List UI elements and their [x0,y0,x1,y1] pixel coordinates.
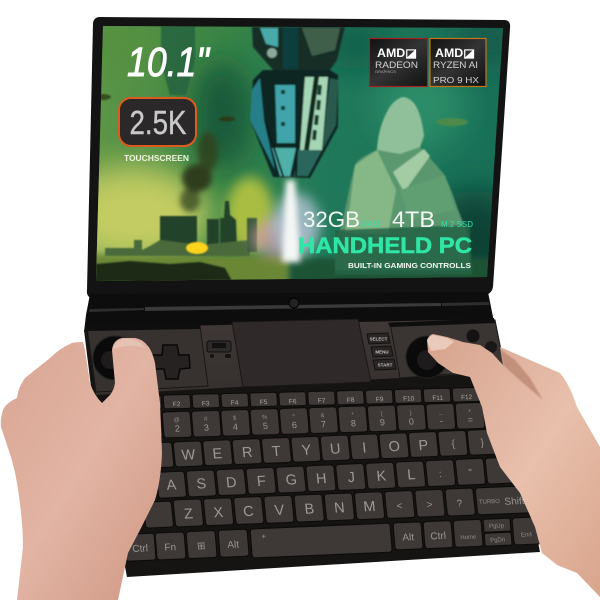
button: menu [371,346,393,357]
ASDF key row: F [256,474,267,490]
bottom key row: Fn [164,542,177,554]
city skyline [105,201,257,256]
number key row [133,402,485,439]
right control panel [390,320,505,378]
function key row: F4 [231,400,239,407]
ASDF key row: G [285,472,298,489]
button: menu: MENU [375,350,389,354]
function key row [134,387,480,410]
bottom key row: Home [460,535,477,541]
smoke plume [180,132,218,212]
function key row: F10 [403,395,415,403]
badge: 2.5K [119,98,196,146]
spec: 32GB RAM: RAM [361,220,380,229]
ZXCV key row [143,486,534,528]
device body [84,319,540,577]
spec: 4TB M.2 SSD [392,212,473,227]
right analog stick [406,336,448,378]
left thumbnail [113,339,145,349]
spec: 4TB M.2 SSD: 4TB [392,207,435,232]
bottom key row: ☀ [261,533,267,541]
ASDF key row: " [468,468,473,479]
badge: AMD Ryzen AI Pro 9 HX: AMD◪ [435,48,475,60]
bottom key row: Ctrl [430,531,446,542]
QWERTY key row: I [362,440,367,456]
bottom key row: PgDn [490,537,505,544]
number key row: 6 [291,420,297,430]
tagline: built-in gaming controls: BUILT-IN GAMING CONTROLLS [348,261,471,270]
function key row: F11 [432,395,444,402]
face buttons [466,330,497,353]
function key row: F5 [260,399,268,406]
ZXCV key row: Shift [504,496,525,508]
ZXCV key row: ? [456,498,463,510]
ZXCV key row: C [242,504,255,520]
number key row: = [467,415,473,425]
spec: 32GB RAM: 32GB [303,207,360,232]
hooded figure [335,97,472,275]
ASDF key row: : [439,469,442,480]
ZXCV key row: M [363,499,376,515]
ASDF key row [156,456,528,498]
left control panel [87,326,208,392]
QWERTY key row: } [480,438,485,449]
laptop lid bezel [87,17,510,299]
bottom key row [124,517,541,563]
badge: AMD Ryzen AI Pro 9 HX [430,38,486,86]
QWERTY key row: { [451,439,456,450]
QWERTY key row: U [329,441,341,458]
button: select: SELECT [370,336,388,342]
ZXCV key row: N [333,500,346,517]
d-pad [150,345,190,379]
number key row: # [204,417,208,423]
hinge [84,292,494,332]
number key row: % [262,415,268,421]
bottom key row: Alt [402,532,415,544]
keyboard deck [87,319,505,395]
number key row: 4 [232,422,238,432]
left analog stick [93,336,137,380]
function key row: F6 [289,398,297,405]
label: touchscreen: TOUCHSCREEN [124,154,189,163]
QWERTY key row: P [418,438,429,454]
badge: 2.5K: 2.5K [130,104,186,141]
bottom key row: Alt [227,540,240,551]
button: start: START [378,362,393,368]
function key row: F7 [318,398,326,405]
left hand [1,338,162,600]
number key row: @ [173,417,180,424]
explosion [186,242,208,254]
right hand crease shadow [501,350,543,400]
ZXCV key row: > [426,500,433,511]
spec: 4TB M.2 SSD: M.2 SSD [441,220,473,229]
ZXCV key row: TURBO [479,499,501,506]
number key row: 5 [262,421,268,431]
badge: AMD Ryzen AI Pro 9 HX: PRO 9 HX [433,75,479,85]
ZXCV key row: X [213,505,224,521]
number key row: 3 [203,423,209,433]
ASDF key row: H [315,471,327,487]
ZXCV key row: < [396,501,403,512]
function key row: F3 [202,400,210,408]
badge: AMD Radeon Graphics [370,38,428,86]
thruster beam [252,180,320,262]
number key row: 7 [320,419,326,429]
QWERTY key row: O [388,439,401,455]
ASDF key row: S [196,476,207,493]
number key row: - [439,416,443,426]
button: select [367,333,390,344]
shoulder switch and mini icons [207,341,231,358]
spec: 32GB RAM [304,212,380,227]
ASDF key row: D [225,475,237,491]
number key row: _ [438,410,443,416]
number key row: 2 [174,424,180,434]
number key row: + [468,409,472,415]
bottom key row: End [521,532,532,539]
screen artwork [96,26,503,281]
badge: AMD Radeon Graphics: RADEON [375,60,418,70]
badge: AMD Radeon Graphics: GRAPHICS [375,69,396,74]
right thumbnail [427,335,454,351]
ZXCV key row: Z [183,506,194,523]
giant drilling ship [250,27,345,178]
function key row: F9 [376,396,384,403]
keyboard [124,387,541,563]
number key row: ^ [292,414,296,420]
foreground bushes [96,260,232,281]
QWERTY key row: R [241,445,253,461]
number key row: 8 [350,418,356,428]
ASDF key row: K [376,468,387,485]
number key row: 9 [379,417,385,428]
number key row: ( [380,411,383,417]
QWERTY key row: T [271,444,282,460]
bottom key row: ⊞ [197,541,206,552]
button: start [373,359,396,370]
QWERTY key row [144,429,498,468]
small flying craft [95,94,468,126]
bottom key row: Ctrl [132,543,148,555]
ASDF key row: A [166,478,177,494]
function key row: F12 [461,394,473,401]
number key row: & [320,413,325,419]
badge: AMD Ryzen AI Pro 9 HX: RYZEN AI [433,60,478,70]
ZXCV key row: B [304,501,315,518]
headline: handheld PC: HANDHELD PC [298,233,472,258]
touchpad [232,319,371,387]
right hand [427,334,600,597]
QWERTY key row: Y [301,443,312,459]
number key row: ) [409,411,412,417]
bottom key row: PgUp [489,523,505,530]
QWERTY key row: W [181,447,196,464]
number key row: $ [233,416,237,422]
QWERTY key row: E [212,446,223,462]
function key row: F8 [347,397,355,404]
function key row: F2 [173,401,181,408]
ASDF key row: J [347,470,356,486]
distant ship silhouette [161,26,195,95]
headline: screen size: 10.1" [127,39,211,85]
ASDF key row: L [407,467,416,484]
number key row: * [351,412,355,418]
badge: AMD Radeon Graphics: AMD◪ [377,48,417,60]
number key row: 0 [408,416,414,427]
ZXCV key row: V [274,503,285,519]
